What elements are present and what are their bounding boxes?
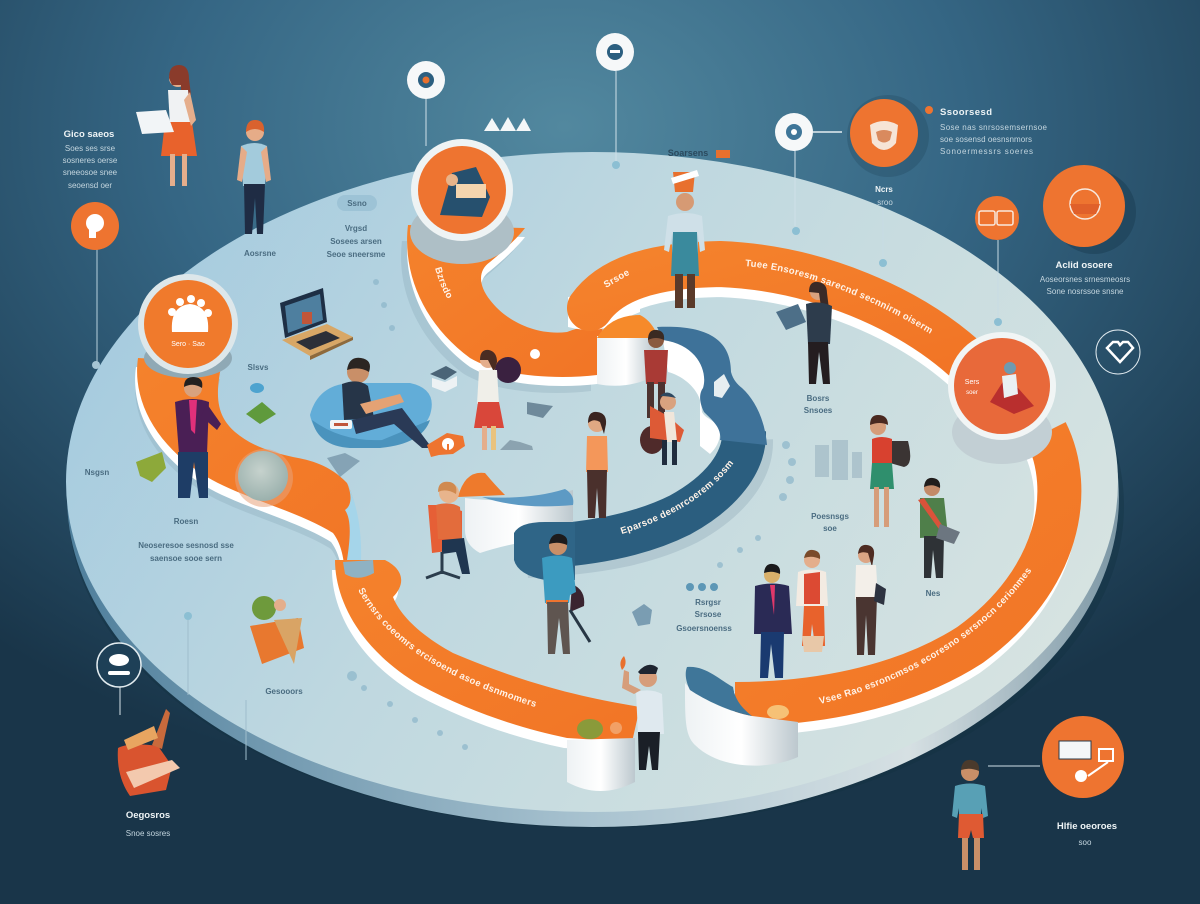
food on pedestal: [577, 705, 789, 739]
person: man with apron: [664, 170, 705, 308]
laptop: [280, 288, 353, 360]
desk panel and lower cylinders: [458, 473, 798, 791]
label: Bosrs: [807, 394, 830, 403]
label: Slsvs: [248, 363, 269, 372]
arrows: triangles: [484, 117, 531, 131]
gray building icons: [815, 440, 862, 480]
text: top right block: Ssoorsesd: [940, 107, 992, 118]
pin: top 3 with badge: [775, 95, 929, 235]
person: woman in red top: [644, 330, 668, 418]
icon: armchair: [118, 709, 180, 796]
person: chef: [620, 656, 664, 770]
text: center-left block: Seoe sneersme: [327, 250, 386, 259]
person: woman in black: [776, 282, 832, 384]
ribbon: top S curve: [401, 225, 602, 393]
text: lower middle: Srsose: [695, 610, 722, 619]
text: left caption: Neoseresoe sesnosd sse: [138, 541, 234, 550]
text: lower-left caption: Oegosros: [126, 810, 170, 821]
globe: [235, 449, 293, 507]
label: Ncrs: [875, 185, 893, 194]
text: bottom right caption: soo: [1079, 838, 1092, 847]
decorative dot trails: [347, 279, 796, 750]
person: man bottom right: [952, 760, 988, 870]
node: right badge: [948, 332, 1056, 464]
text: lower-left caption: Snoe sosres: [126, 829, 170, 838]
text: right block: Aclid osoere: [1055, 260, 1113, 271]
person: man in red white: [796, 550, 828, 652]
person: man in teal: [542, 534, 590, 654]
pin: lower left: [97, 612, 246, 760]
labels: soe: [823, 524, 837, 533]
person: woman in white top: [855, 545, 886, 655]
text: right block: [1040, 260, 1130, 296]
label: [875, 185, 893, 267]
text: center-left block: [327, 195, 386, 259]
text: lower middle: [632, 583, 732, 633]
ribbon: upper arc: [567, 241, 976, 384]
text: top left block: Soes ses srse: [65, 144, 116, 153]
text: lower middle: Rsrgsr: [695, 598, 721, 607]
person: man in dark suit: [175, 377, 221, 498]
icon: bottom right badge: [988, 716, 1124, 798]
ribbon label: Vsee Rao esroncmsos ecoresno sersnocn cerionmes: [818, 568, 1031, 704]
label: sroo: [877, 198, 893, 207]
cylinder: center: [597, 315, 656, 386]
text: top left block: sneeosoe snee: [63, 168, 118, 177]
ribbon: upper arc: Srsoe: [602, 267, 632, 291]
text: left caption: saensoe sooe sern: [150, 554, 222, 563]
text: top left block: [63, 129, 118, 190]
text: center-left block: Vrgsd: [345, 224, 367, 233]
person: at desk: [426, 482, 470, 578]
node: left badge: Sero · Sao: [171, 341, 205, 348]
text: top right block: Sose nas snrsosemsernsoe: [940, 123, 1048, 132]
text: right block: Sone nosrssoe snsne: [1047, 287, 1124, 296]
man on sofa: [310, 358, 432, 477]
label: Snsoes: [804, 406, 833, 415]
icon: pin left: [71, 202, 119, 369]
plant box: [250, 596, 304, 664]
node: right badge: Sers: [965, 379, 980, 386]
label: [668, 148, 730, 158]
node: left badge: [138, 274, 238, 378]
text: top right block: Sonoermessrs soeres: [940, 147, 1033, 156]
text: top left block: sosneres oerse: [63, 156, 118, 165]
labels: Nes: [926, 589, 941, 598]
person: woman with backpack: [870, 415, 910, 527]
node: top badge: [410, 139, 514, 264]
person: woman with laptop: [136, 65, 197, 186]
ribbon: blue spiral: [528, 326, 773, 578]
label: Gesooors: [265, 687, 303, 696]
text: top right block: [925, 106, 1048, 156]
person: woman in red skirt: [474, 350, 504, 450]
person: seated with red chair: [640, 392, 684, 465]
text: Roesn: [174, 517, 198, 526]
text: lower-left caption: [126, 810, 170, 838]
waterfall fold: [345, 483, 361, 560]
label: Nsgsn: [85, 468, 109, 477]
icon: chat bubble: [427, 433, 465, 457]
pin: top 2: [596, 33, 634, 169]
label: Soarsens: [668, 148, 708, 158]
person: man in dark suit 2: [754, 564, 792, 678]
ribbon: lower: [332, 560, 638, 748]
text: left caption: [138, 541, 234, 563]
person: woman in orange top: [586, 412, 608, 518]
icon: right big badge: [1043, 165, 1136, 254]
ribbon label: Bzrsdo: [435, 266, 452, 298]
ribbon: left: [135, 358, 372, 591]
text: top right block: soe sosensd oesnsnmors: [940, 135, 1032, 144]
icon: small badge: [975, 196, 1019, 326]
platform disc: [66, 152, 1124, 828]
label: Aosrsne: [244, 249, 277, 258]
ribbon label: Sernsrs coeomrs ercisoend asoe dsnmomers: [358, 588, 536, 707]
icon: heart: [1096, 330, 1140, 374]
text: center-left block: Ssno: [347, 199, 367, 208]
text: bottom right caption: [1057, 821, 1117, 847]
ribbon label: Eparsoe deenrcoerem sosm: [620, 461, 734, 534]
ribbon: right: [732, 422, 1082, 732]
text: top left block: Gico saeos: [64, 129, 114, 140]
text: right block: Aoseorsnes srnesmeosrs: [1040, 275, 1130, 284]
labels: [811, 512, 941, 598]
ribbon label: Tuee Ensoresm sarecnd secnnirm oiserm: [746, 260, 932, 334]
labels: Poesnsgs: [811, 512, 849, 521]
text: bottom right caption: Hlfie oeoroes: [1057, 821, 1117, 832]
node: right badge: soer: [966, 390, 978, 396]
person: woman in blue top: [237, 120, 271, 234]
text: top left block: seoensd oer: [68, 181, 112, 190]
text: center-left block: Sosees arsen: [330, 237, 382, 246]
label: [804, 394, 833, 415]
small objects: [136, 349, 553, 482]
pin: top 1: [407, 61, 445, 146]
text: lower middle: Gsoersnoenss: [676, 624, 732, 633]
person: man in green: [918, 478, 960, 578]
